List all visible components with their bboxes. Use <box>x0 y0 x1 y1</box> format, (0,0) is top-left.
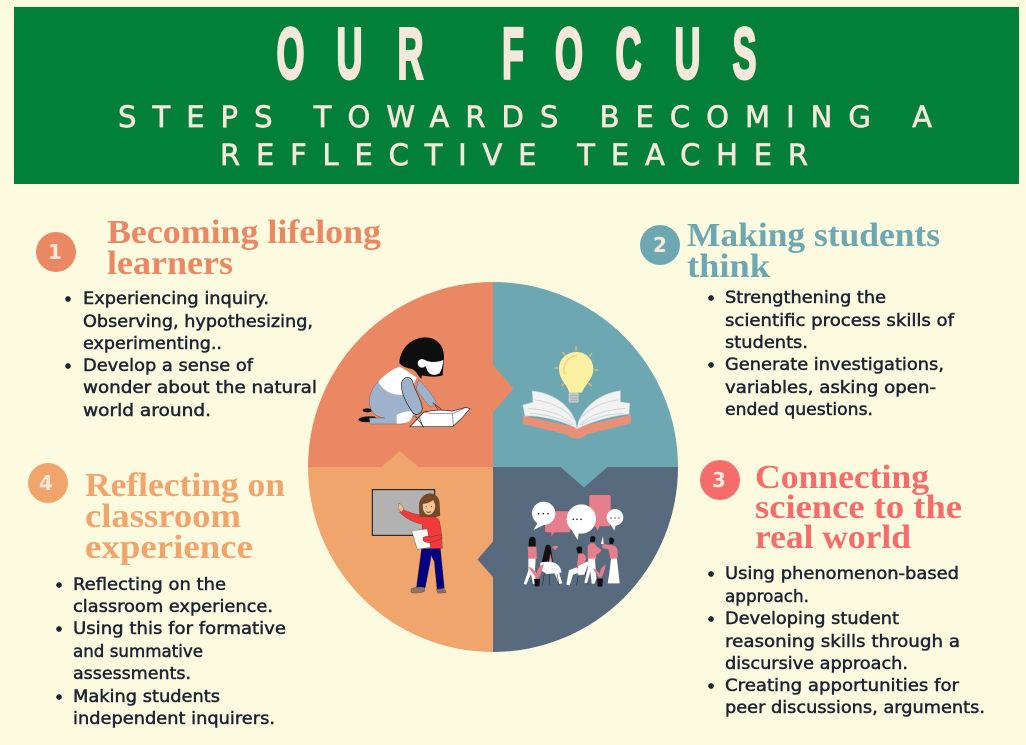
bullets 3 <box>708 564 985 718</box>
heading 3: real world <box>755 519 911 556</box>
bullets 2: scientific process skills of <box>725 311 955 331</box>
bullets 1: Experiencing inquiry. <box>83 289 269 309</box>
subtitle <box>118 100 932 172</box>
icon: group discussion with speech bubbles <box>524 495 623 587</box>
bullets 1: world around. <box>83 401 211 421</box>
bullets 2: students. <box>725 333 808 353</box>
heading 2: think <box>687 248 770 285</box>
heading 1: learners <box>107 245 233 282</box>
bullets 3: Using phenomenon-based <box>725 564 959 584</box>
section 1: becoming lifelong learners <box>36 214 381 421</box>
bullets 3: approach. <box>725 587 809 607</box>
bullets 3: discursive approach. <box>725 654 908 674</box>
section 3: connecting science to the real world <box>700 459 985 718</box>
bullets 4: Reflecting on the <box>73 575 226 595</box>
badge 4: 4 <box>39 471 53 495</box>
heading 3 <box>755 459 962 556</box>
badge 3 <box>700 460 740 500</box>
bullets 1: Develop a sense of <box>83 356 254 376</box>
bullets 4: Using this for formative <box>73 619 286 639</box>
bullets 1: Observing, hypothesizing, <box>83 312 313 332</box>
subtitle: REFLECTIVE TEACHER <box>220 138 808 172</box>
quadrant: light orange <box>308 467 493 652</box>
heading 4: classroom <box>85 498 241 535</box>
plant right <box>593 565 606 578</box>
bullets 4: Making students <box>73 687 220 707</box>
icon: teacher at the board <box>372 490 446 593</box>
bullets 4: independent inquirers. <box>73 709 275 729</box>
quadrant: orange <box>308 282 493 467</box>
heading 1 <box>107 214 381 282</box>
badge 4 <box>28 463 68 503</box>
central circle diagram <box>308 282 678 652</box>
bullets 2: Generate investigations, <box>725 355 944 375</box>
bullets 2: ended questions. <box>725 400 873 420</box>
badge 1 <box>36 232 76 272</box>
arrow notch: slate into light orange <box>478 542 493 577</box>
plant left <box>528 564 544 578</box>
bullets 3: Developing student <box>725 609 899 629</box>
bullets 2: variables, asking open- <box>725 378 936 398</box>
bullets 4: and summative <box>73 642 203 662</box>
person seated right <box>576 546 582 553</box>
heading 2 <box>687 217 940 285</box>
heading 4: Reflecting on <box>85 467 285 504</box>
badge 1: 1 <box>48 240 62 264</box>
bullets 1: experimenting.. <box>83 334 222 354</box>
badge 2 <box>640 225 680 265</box>
bullets 4: assessments. <box>73 664 191 684</box>
quadrant: slate <box>493 467 678 652</box>
badge 2: 2 <box>653 233 667 257</box>
bullets 2 <box>708 288 955 420</box>
bullets 1: wonder about the natural <box>83 378 317 398</box>
title: OUR FOCUS <box>276 14 757 95</box>
bullets 4: classroom experience. <box>73 597 273 617</box>
heading 2: Making students <box>687 217 940 254</box>
bullets 1 <box>65 289 317 421</box>
quadrant: teal <box>493 282 678 467</box>
bullets 3: peer discussions, arguments. <box>725 698 985 718</box>
icon: open book with light bulb <box>523 346 631 439</box>
arrow notch: light orange into orange <box>382 451 418 467</box>
bullets 2: Strengthening the <box>725 288 886 308</box>
icon: girl reading a book <box>358 337 470 427</box>
heading 3: science to the <box>755 489 962 526</box>
person seated left <box>542 545 553 562</box>
heading 4 <box>85 467 285 566</box>
badge 3: 3 <box>712 468 726 492</box>
bullets 4 <box>56 575 286 729</box>
bullets 3: Creating apportunities for <box>725 676 959 696</box>
person left standing <box>528 537 536 547</box>
subtitle: STEPS TOWARDS BECOMING A <box>118 100 932 134</box>
arrow notch: teal into slate <box>560 467 608 488</box>
heading 3: Connecting <box>755 459 929 496</box>
two people high five <box>590 536 596 542</box>
section 4: reflecting on classroom experience <box>28 463 286 729</box>
arrow notch: orange into teal <box>493 365 514 412</box>
bullets 3: reasoning skills through a <box>725 632 960 652</box>
section 2: making students think <box>640 217 955 420</box>
heading 4: experience <box>85 529 253 566</box>
heading 1: Becoming lifelong <box>107 214 381 251</box>
header banner <box>14 7 1019 184</box>
